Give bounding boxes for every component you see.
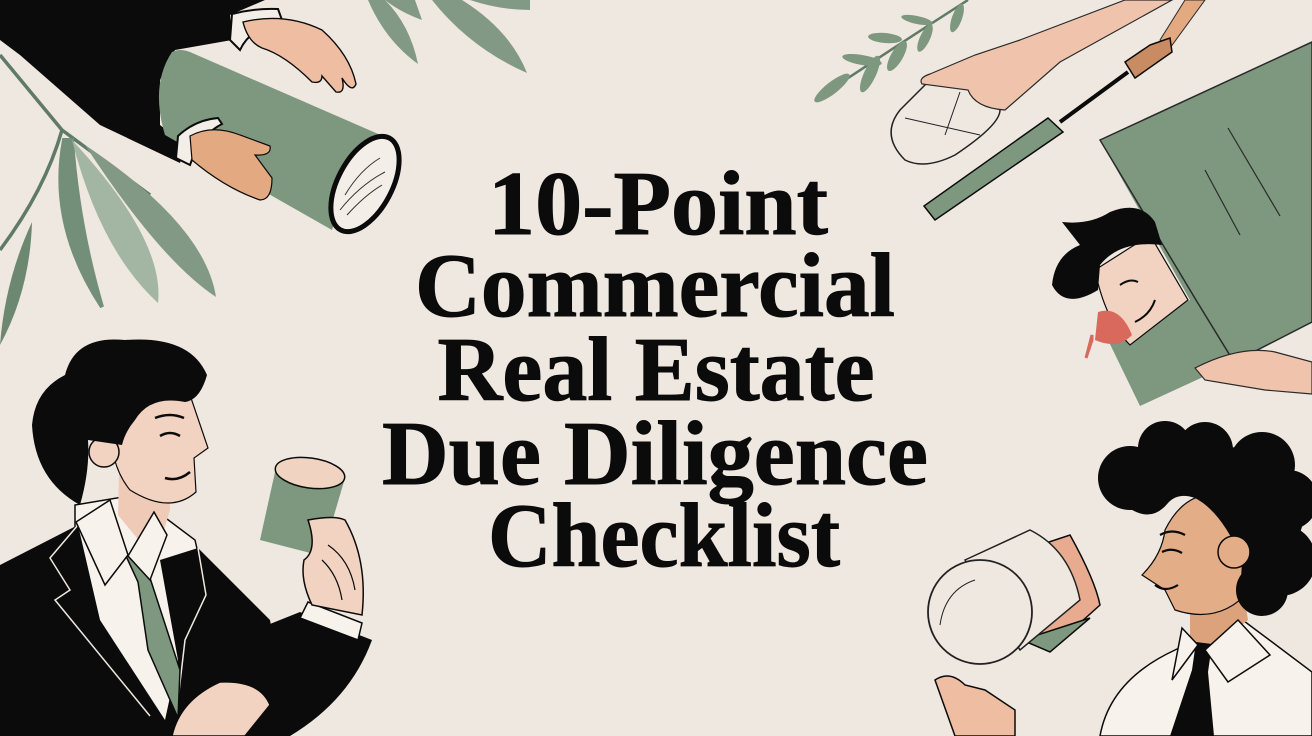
icon: magnifier and sandwich: [1020, 535, 1100, 650]
illustration: top-left branch: [0, 55, 216, 345]
icon: green roll: [159, 50, 392, 230]
title: Real Estate: [438, 319, 874, 420]
title: [382, 153, 928, 586]
face: [1142, 494, 1250, 614]
illustration: top-left arm with suit holding roll: [0, 0, 413, 243]
illustration: man with suit bottom-left: [0, 339, 372, 736]
hair: [32, 339, 207, 505]
sleeve arm: [215, 612, 372, 736]
illustration: woman peeking behind green box: [1052, 42, 1312, 406]
title: Checklist: [488, 485, 840, 586]
title: Commercial: [415, 235, 895, 336]
illustration: top-left leaves: [368, 0, 530, 73]
illustration: woman with magnifier bottom-right: [928, 421, 1312, 736]
icon: black tie: [1170, 642, 1214, 736]
face: [109, 375, 208, 503]
icon: green tool handle: [924, 118, 1063, 220]
icon: can: [260, 472, 345, 556]
illustration: top-right branch: [811, 0, 968, 106]
icon: mouse outline: [891, 78, 1000, 164]
title: 10-Point: [488, 153, 828, 254]
hand: [303, 518, 363, 615]
illustration: top-right hand with mouse and tool: [891, 0, 1205, 220]
title: Due Diligence: [382, 403, 928, 504]
icon: tie: [126, 550, 180, 718]
hair: [1098, 421, 1312, 616]
